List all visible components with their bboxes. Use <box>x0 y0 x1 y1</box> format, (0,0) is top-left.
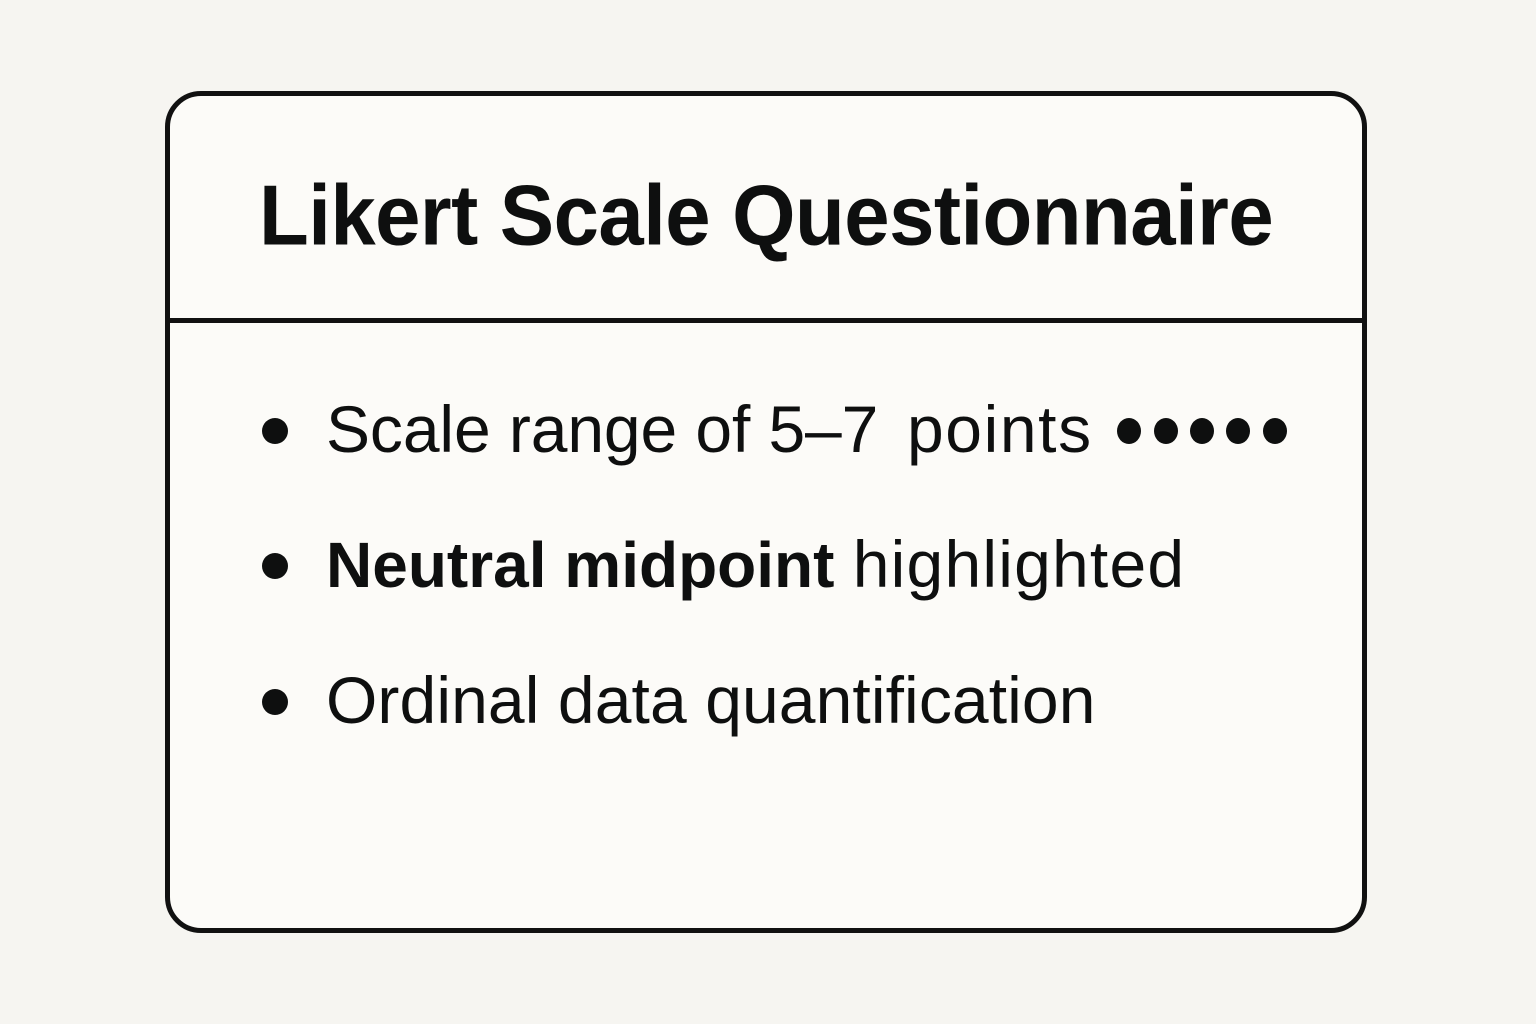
header divider <box>170 318 1362 323</box>
bullet 1 marker <box>262 418 288 444</box>
bullet 2 text: Neutral midpoint highlighted <box>326 527 1185 601</box>
bullet 1 text: Scale range of 5–7 <box>326 392 878 466</box>
icon: five scale dots <box>1117 418 1287 444</box>
bullet 3 text: Ordinal data quantification <box>326 663 1096 737</box>
bullet 2 marker <box>262 553 288 579</box>
panel: questionnaire card <box>165 91 1367 933</box>
bullet 3 marker <box>262 689 288 715</box>
title: Likert Scale Questionnaire <box>259 168 1273 263</box>
bullet 1 text continued: points <box>907 392 1093 466</box>
